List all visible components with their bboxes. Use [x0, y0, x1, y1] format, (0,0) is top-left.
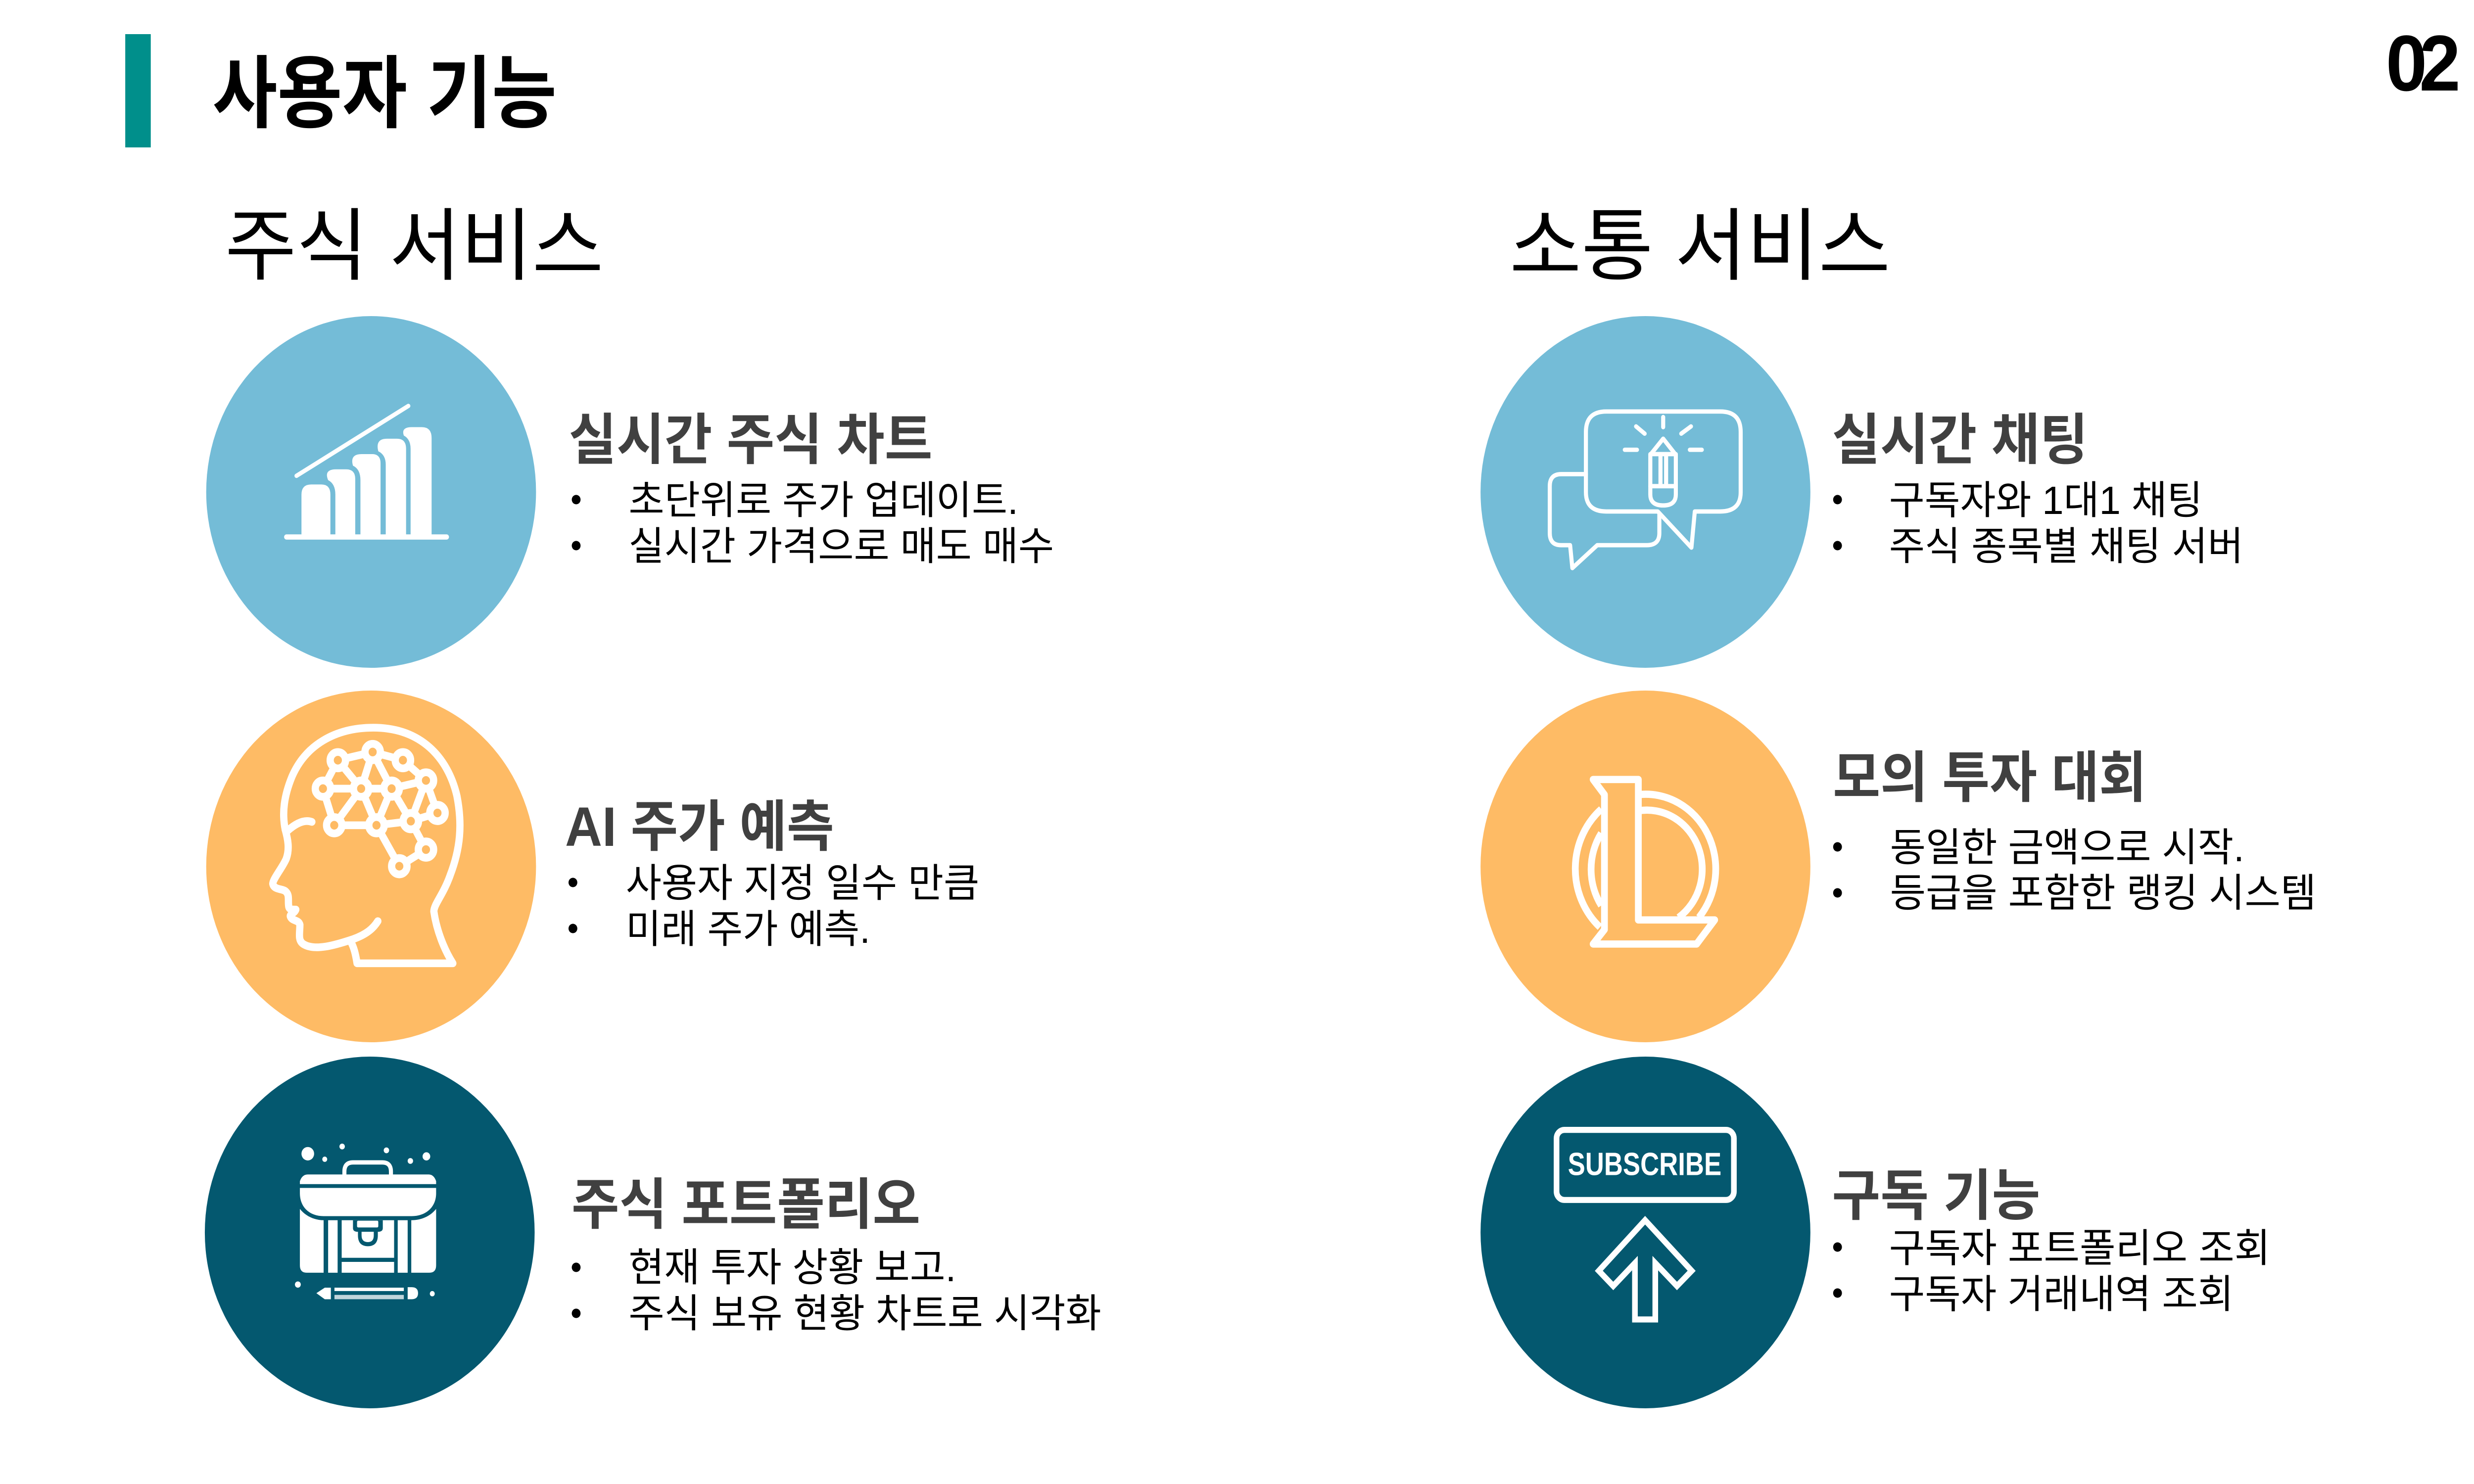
heading: 실시간 주식 차트 [569, 410, 932, 471]
icon: briefcase in navy circle [205, 1057, 535, 1408]
column heading: communication services: 소통 서비스 [1510, 202, 1891, 290]
bullet list [569, 862, 979, 952]
heading: 구독 기능 [1832, 1165, 2040, 1227]
title accent bar [125, 34, 151, 147]
title: 사용자 기능 [212, 50, 557, 138]
bullet list: 초단위로 주가 업데이트. [628, 479, 1018, 523]
bullet list: 구독자와 1대1 채팅 [1889, 479, 2203, 523]
bullet list: 동일한 금액으로 시작. [1890, 826, 2244, 870]
icon: subscribe button and arrow in navy circle: SUBSCRIBE [1568, 1147, 1721, 1182]
heading: 모의 투자 대회 [1833, 747, 2146, 809]
icon: bar chart in blue circle [206, 316, 536, 668]
panel: subscription [1480, 1057, 2270, 1408]
bullet list: 미래 주가 예측. [626, 908, 870, 952]
bullet list: 주식 보유 현황 차트로 시각화 [628, 1292, 1101, 1336]
heading: 실시간 채팅 [1832, 410, 2088, 471]
heading: 주식 포트폴리오 [571, 1174, 920, 1236]
bullet list [572, 1246, 1101, 1336]
icon: speech bubbles with pencil in blue circle [1480, 316, 1810, 668]
bullet list: 구독자 거래내역 조회 [1889, 1273, 2234, 1317]
bullet list: 등급을 포함한 랭킹 시스템 [1890, 872, 2316, 916]
bullet list: 실시간 가격으로 매도 매수 [628, 525, 1054, 569]
bullet list: 구독자 포트폴리오 조회 [1889, 1227, 2270, 1271]
heading: AI 주가 예측 [565, 796, 834, 858]
bullet list: 현재 투자 상황 보고. [628, 1246, 956, 1290]
panel: realtime chat [1480, 316, 2243, 668]
bullet list [572, 479, 1054, 569]
page number: 02 [2386, 19, 2458, 107]
bullet list [1833, 826, 2316, 916]
panel: realtime stock chart [206, 316, 1054, 668]
bullet list: 주식 종목별 채팅 서버 [1889, 525, 2243, 569]
panel: mock investment tournament [1480, 691, 2316, 1042]
icon: subscribe button and arrow in navy circle [1480, 1057, 1810, 1408]
panel: stock portfolio [205, 1057, 1101, 1408]
icon: league emblem in orange circle [1480, 691, 1810, 1042]
column heading: stock services: 주식 서비스 [225, 202, 604, 290]
bullet list [1833, 1227, 2270, 1317]
panel: AI price prediction [206, 691, 979, 1042]
bullet list: 사용자 지정 일수 만큼 [626, 862, 979, 906]
bullet list [1833, 479, 2243, 569]
icon: head with neural network in orange circle [206, 691, 536, 1042]
